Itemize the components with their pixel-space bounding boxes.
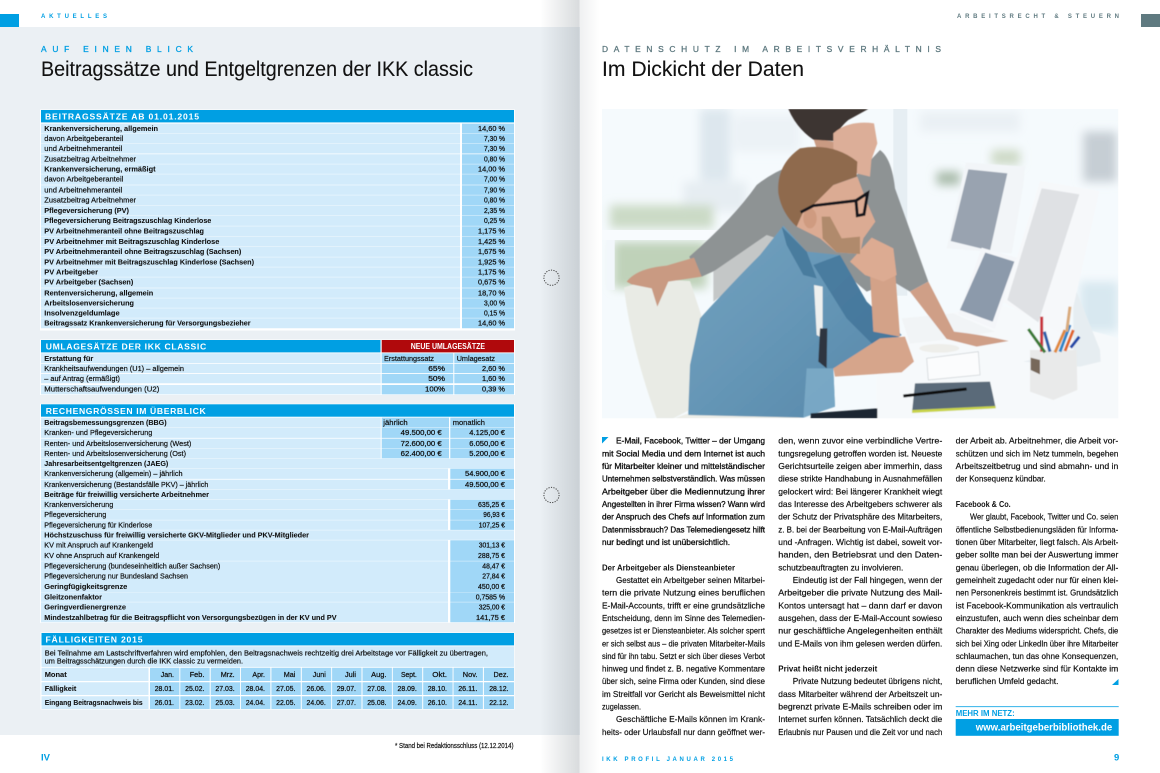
column 3: schützen und sich im Netz tummeln, begehen <box>956 448 1119 458</box>
panel: Rechengrößen table: Krankenversicherung (Bestandsfälle PKV) – jährlich <box>44 480 208 489</box>
panel: Fälligkeiten table: Aug. <box>371 670 386 679</box>
panel: Beitragssätze table: PV Arbeitnehmeranteil ohne Beitragszuschlag <box>44 227 204 236</box>
panel: Fälligkeiten table: Mai <box>284 670 296 679</box>
panel: Fälligkeiten table: 29.07. <box>337 684 356 693</box>
heading: Umlagesätze: UMLAGESÄTZE DER IKK CLASSIC <box>46 342 206 352</box>
right page number: 9 <box>1114 752 1119 764</box>
column 3: Charakter des Mediums widerspricht. Chefs, die <box>956 626 1119 636</box>
panel: Rechengrößen table: 54.900,00 € <box>465 469 506 478</box>
panel: Rechengrößen table <box>40 404 515 623</box>
panel: Rechengrößen table: 49.500,00 € <box>401 428 442 437</box>
panel: Rechengrößen table: 62.400,00 € <box>401 449 442 458</box>
badge: neue Umlagesätze <box>382 340 514 352</box>
panel: Beitragssätze table: 1,925 % <box>478 258 505 267</box>
man hair <box>778 147 857 227</box>
row labels <box>42 668 148 709</box>
panel: Umlagesätze table: 65% <box>428 364 445 373</box>
back monitor <box>947 162 1025 253</box>
column 2: und -Anfragen. Wichtig ist dabei, soweit vor- <box>778 537 943 547</box>
body text <box>602 575 766 737</box>
panel: Fälligkeiten table: Dez. <box>494 670 508 679</box>
panel: Beitragssätze table <box>40 110 515 330</box>
note text: Bei Teilnahme am Lastschriftverfahren wird empfohlen, den Beitragsnachweis rechtzeitig drei Arbeitstage vor Fälligkeit zu übertragen, <box>45 648 488 657</box>
spine shadow <box>540 0 600 773</box>
column 2: und E-Mails von ihm gelesen werden dürfen. <box>778 638 942 648</box>
panel: Beitragssätze table: 14,60 % <box>478 319 505 328</box>
panel: Rechengrößen table: 107,25 € <box>479 521 506 530</box>
man face <box>797 177 875 254</box>
column 3: gemeinheit zugedacht oder nur für einen klei- <box>956 575 1118 585</box>
body text: heits- oder Urlaubsfall nur dann geöffnet wer- <box>602 727 765 737</box>
panel: Beitragssätze table: 14,00 % <box>478 165 505 174</box>
panel: Rechengrößen table: Renten- und Arbeitslosenversicherung (Ost) <box>44 449 186 458</box>
panel: Beitragssätze table: Pflegeversicherung Beitragszuschlag Kinderlose <box>44 216 211 225</box>
left page header tab <box>0 14 19 27</box>
article intro: mit Social Media und dem Internet ist auch <box>602 448 765 458</box>
panel: Beitragssätze table: 0,80 % <box>484 196 505 205</box>
panel: Rechengrößen table: 48,47 € <box>482 562 506 571</box>
column 3: der Arbeit ab. Arbeitnehmer, die Arbeit vor- <box>956 436 1119 446</box>
panel: Rechengrößen table: 27,84 € <box>482 572 506 581</box>
body text: Entscheidung, denn im Sinne des Telemedien- <box>602 613 765 623</box>
column 3: ist Facebook-Kommunikation als vertraulich <box>956 600 1119 610</box>
left section label: AKTUELLES <box>41 14 107 20</box>
man pants <box>811 408 877 418</box>
panel: Fälligkeiten table: Mrz. <box>221 670 235 679</box>
panel: Rechengrößen table: Pflegeversicherung für Kinderlose <box>44 521 152 530</box>
body text: im Streitfall vor Gericht als Beweismittel nicht <box>602 689 766 699</box>
article intro: für Mitarbeiter kleiner und mittelständischer <box>602 461 765 471</box>
panel: Fälligkeiten table: 28.09. <box>398 684 417 693</box>
laptop base <box>902 313 995 344</box>
footnote: * Stand bei Redaktionsschluss (12.12.2014) <box>395 741 514 750</box>
body text: gesetzes ist er Diensteanbieter. Als solcher sperrt <box>602 626 766 636</box>
panel: Beitragssätze table: 7,30 % <box>484 144 505 153</box>
panel: Beitragssätze table: Zusatzbeitrag Arbeitnehmer <box>44 155 136 164</box>
left page number: IV <box>41 752 51 764</box>
pencils <box>1028 307 1079 352</box>
panel: Rechengrößen table: 6.050,00 € <box>469 439 506 448</box>
panel: Rechengrößen table: Krankenversicherung (allgemein) – jährlich <box>44 469 183 478</box>
main monitor stand <box>1026 295 1100 366</box>
article intro: Angestellten in ihrer Firma wissen? Wann wird <box>602 499 765 509</box>
panel: Beitragssätze table: 14,60 % <box>478 124 505 133</box>
panel: Rechengrößen table: Geringfügigkeitsgrenze <box>44 582 127 591</box>
panel: Beitragssätze table: Arbeitslosenversicherung <box>44 299 134 308</box>
panel: Rechengrößen table: Krankenversicherung <box>44 500 113 509</box>
column 2 <box>778 436 943 737</box>
panel: Beitragssätze table: Rentenversicherung, allgemein <box>44 289 154 298</box>
panel: Rechengrößen table: 4.125,00 € <box>469 428 506 437</box>
callout: mehr im Netz: MEHR IM NETZ: <box>956 708 1015 718</box>
table rows: label column <box>41 124 460 328</box>
woman body <box>689 150 928 292</box>
panel: Beitragssätze table: PV Arbeitgeber (Sachsen) <box>44 278 134 287</box>
man beard <box>822 217 860 254</box>
panel: Fälligkeiten table: 25.03. <box>215 698 235 707</box>
panel: Fälligkeiten table: 24.04. <box>246 698 265 707</box>
column 3: beruflichen Umfeld gedacht. <box>956 676 1058 686</box>
panel: Rechengrößen table: 49.500,00 € <box>465 480 506 489</box>
column 2: diese strikte Handhabung in Ausnahmefällen <box>778 474 943 484</box>
man denim shirt <box>688 226 902 418</box>
man arm <box>870 268 900 337</box>
panel: Beitragssätze table: Pflegeversicherung (PV) <box>44 206 129 215</box>
column 2: der Schutz der Privatsphäre des Mitarbeiters, <box>778 512 942 522</box>
keyboard <box>927 352 980 380</box>
column 2: den, wenn zuvor eine verbindliche Vertre- <box>778 436 943 446</box>
woman forearm <box>910 282 1009 347</box>
column 2: handen, den Betriebsrat und den Daten- <box>778 550 943 560</box>
panel: Rechengrößen table: Höchstzuschuss für freiwillig versicherte GKV-Mitglieder und PKV-Mitglieder <box>44 531 309 540</box>
panel: Umlagesätze table: 1,60 % <box>482 374 505 383</box>
column 2: Internet surfen können. Tatsächlich deckt die <box>778 714 943 724</box>
panel: Rechengrößen table: jährlich <box>382 418 408 427</box>
panel: Fälligkeiten table: 27.03. <box>215 684 235 693</box>
panel: Fälligkeiten table: 28.01. <box>155 684 174 693</box>
column 3: schlaumachen, tun das ohne Konsequenzen, <box>956 651 1118 661</box>
column 3: Arbeitszeitbetrug und sind abmahn- und in <box>956 461 1119 471</box>
month cells <box>150 668 514 709</box>
panel: Fälligkeiten table: 22.05. <box>276 698 295 707</box>
column 2: nur geschäftliche Angelegenheiten enthält <box>778 626 943 636</box>
photo: two colleagues at a computer <box>602 109 1118 418</box>
column 3: tionen über Mitarbeiter, liegt falsch. Als Arbeit- <box>956 537 1118 547</box>
panel: Umlagesätze table: Erstattungssatz <box>384 354 434 363</box>
desk <box>876 322 1100 418</box>
panel: Beitragssätze table: 0,25 % <box>484 216 505 225</box>
left kicker: AUF EINEN BLICK <box>41 44 193 54</box>
panel: Umlagesätze table: Krankheitsaufwendungen (U1) – allgemein <box>44 364 184 373</box>
panel: Fälligkeiten table: Juli <box>345 670 356 679</box>
column 2: Erlaubnis nur Pausen und die Zeit vor und nach <box>778 727 943 737</box>
man lower arm <box>833 337 914 377</box>
panel: Rechengrößen table: Renten- und Arbeitslosenversicherung (West) <box>44 439 192 448</box>
panel: Rechengrößen table: KV ohne Anspruch auf Krankengeld <box>44 551 159 560</box>
right kicker: DATENSCHUTZ IM ARBEITSVERHÄLTNIS <box>602 44 941 54</box>
callout: mehr im Netz: www.arbeitgeberbibliothek.de <box>975 723 1113 734</box>
pen holder <box>1030 350 1077 400</box>
panel: Fälligkeiten table: 28.04. <box>246 684 265 693</box>
body text: er sich selbst aus – die privaten Mitarbeiter-Mails <box>602 638 765 648</box>
body text: tern die private Nutzung eines beruflichen <box>602 588 765 598</box>
panel: Fälligkeiten table: 26.10. <box>428 698 447 707</box>
panel: Umlagesätze table <box>40 340 515 395</box>
panel: Fälligkeiten table: Monat <box>45 670 67 679</box>
article intro: der Anspruch des Chefs auf Information zum <box>602 512 765 522</box>
panel: Beitragssätze table: PV Arbeitgeber <box>44 268 98 277</box>
panel: Rechengrößen table: Geringverdienergrenze <box>44 603 126 612</box>
panel: Rechengrößen table: KV mit Anspruch auf Krankengeld <box>44 541 153 550</box>
body text: sind für ihn tabu. Setzt er sich über dieses Verbot <box>602 651 766 661</box>
panel: Rechengrößen table: 288,75 € <box>478 551 506 560</box>
woman neck <box>813 138 840 155</box>
panel: Beitragssätze table: 1,675 % <box>478 247 505 256</box>
column 2: tungsregelung getroffen worden ist. Neueste <box>778 448 943 458</box>
note text: um Beitragsschätzungen durch die IKK classic zu vermeiden. <box>45 656 243 665</box>
panel: Beitragssätze table: 7,90 % <box>484 186 505 195</box>
article intro: Arbeitgeber über die Mediennutzung ihrer <box>602 486 765 496</box>
panel: Rechengrößen table: Jahresarbeitsentgeltgrenzen (JAEG) <box>44 459 169 468</box>
panel: Fälligkeiten table: Juni <box>313 670 326 679</box>
body text: zugelassen. <box>602 702 641 712</box>
article intro: nur bedingt und ist unübersichtlich. <box>602 537 730 547</box>
article end marker <box>1112 679 1118 685</box>
woman arm on chair <box>627 258 702 307</box>
panel: Rechengrößen table: Kranken- und Pflegeversicherung <box>44 428 152 437</box>
column 2: Eindeutig ist der Fall hingegen, wenn der <box>793 575 943 585</box>
subheading: Facebook & Co. <box>956 499 1011 509</box>
left title: Beitragssätze und Entgeltgrenzen der IKK classic <box>41 58 473 81</box>
main monitor <box>1041 285 1076 322</box>
woman face <box>833 123 877 177</box>
panel: Beitragssätze table: 7,00 % <box>484 175 505 184</box>
column 2: Gerichtsurteile zeigen aber immerhin, dass <box>778 461 942 471</box>
panel: Fälligkeiten table: 26.06. <box>306 684 326 693</box>
man glasses <box>801 193 868 216</box>
panel: Rechengrößen table: 450,00 € <box>478 582 506 591</box>
panel: Rechengrößen table: Beiträge für freiwillig versicherte Arbeitnehmer <box>44 490 209 499</box>
note text <box>42 646 514 667</box>
panel: Beitragssätze table: PV Arbeitnehmeranteil ohne Beitragszuschlag (Sachsen) <box>44 247 242 256</box>
panel: Fälligkeiten table: 24.11. <box>458 698 478 707</box>
badge: neue Umlagesätze: NEUE UMLAGESÄTZE <box>411 342 486 351</box>
panel: Beitragssätze table: Krankenversicherung, ermäßigt <box>44 165 156 174</box>
panel: Beitragssätze table: Beitragssatz Krankenversicherung für Versorgungsbezieher <box>44 319 251 328</box>
hole punch marks <box>544 270 559 503</box>
right page header tab <box>1141 14 1160 27</box>
mouse <box>919 344 959 353</box>
panel: Umlagesätze table: Erstattung für <box>44 354 93 363</box>
panel: Fälligkeiten table: 27.07. <box>337 698 356 707</box>
subheading: Privat heißt nicht jederzeit <box>778 664 877 674</box>
panel: Fälligkeiten table: Fälligkeit <box>45 684 77 693</box>
heading: Fälligkeiten: FÄLLIGKEITEN 2015 <box>46 635 143 645</box>
panel: Beitragssätze table: 1,425 % <box>478 237 505 246</box>
column 2: ausgehen, dass der E-Mail-Account sowieso <box>778 613 943 623</box>
column 3 <box>956 436 1119 686</box>
panel: Rechengrößen table: Gleitzonenfaktor <box>44 593 102 602</box>
body text: über sich, seine Firma oder Kunden, sind diese <box>602 676 765 686</box>
left page background <box>0 27 580 735</box>
panel: Rechengrößen table: Beitragsbemessungsgrenzen (BBG) <box>44 418 167 427</box>
column 1 <box>602 436 766 737</box>
panel: Fälligkeiten table: 28.10. <box>428 684 447 693</box>
column 2: begrenzt private E-Mails schreiben oder im <box>778 702 942 712</box>
panel: Umlagesätze table: 100% <box>425 385 445 394</box>
woman hair <box>788 109 868 141</box>
panel: Rechengrößen table: 301,13 € <box>479 541 506 550</box>
right section label: ARBEITSRECHT & STEUERN <box>957 14 1119 20</box>
panel: Beitragssätze table: Zusatzbeitrag Arbeitnehmer <box>44 196 136 205</box>
column 2: Kontos untersagt hat – dann darf er davon <box>778 600 943 610</box>
panel: Beitragssätze table: 0,80 % <box>484 155 505 164</box>
panel: Beitragssätze table: davon Arbeitgeberanteil <box>44 175 124 184</box>
small monitor <box>981 247 990 251</box>
stylus <box>903 389 967 396</box>
panel: Beitragssätze table: Insolvenzgeldumlage <box>44 309 120 318</box>
column 3: öffentliche Selbstbedienungsläden für Informa- <box>956 524 1118 534</box>
panel: Beitragssätze table: 7,30 % <box>484 134 505 143</box>
body text: E-Mail-Accounts, trifft er eine grundsätzliche <box>602 600 765 610</box>
callout: mehr im Netz <box>956 706 1119 736</box>
column 3: der Konsequenz kündbar. <box>956 474 1046 484</box>
column 3: denn diese Netzwerke sind für Kontakte im <box>956 664 1118 674</box>
table rows: value column <box>462 124 514 328</box>
tablet <box>912 382 996 412</box>
column 2: Private Nutzung bedeutet übrigens nicht, <box>793 676 942 686</box>
panel: Fälligkeiten table: 22.12. <box>489 698 508 707</box>
panel: Beitragssätze table: 0,675 % <box>478 278 505 287</box>
heading: Rechengrößen: RECHENGRÖSSEN IM ÜBERBLICK <box>46 406 206 416</box>
panel: Fälligkeiten table: Sept. <box>401 670 417 679</box>
panel: Fälligkeiten table <box>40 632 514 710</box>
article intro: Datenmissbrauch? Das Telemediengesetz hilft <box>602 524 766 534</box>
rows: label column <box>41 418 514 622</box>
right footer label: IKK PROFIL JANUAR 2015 <box>602 757 734 763</box>
panel: Fälligkeiten table: Eingang Beitragsnachweis bis <box>45 698 143 707</box>
panel: Fälligkeiten table: 23.02. <box>185 698 204 707</box>
panel: Rechengrößen table: 96,93 € <box>483 510 506 519</box>
panel: Rechengrößen table: Pflegeversicherung nur Bundesland Sachsen <box>44 572 188 581</box>
column 3: Wer glaubt, Facebook, Twitter und Co. seien <box>970 512 1119 522</box>
body text: hinweg und findet z. B. negative Kommentare <box>602 664 765 674</box>
panel: Fälligkeiten table: Feb. <box>190 670 204 679</box>
column 2: schutzbeauftragten zu involvieren. <box>778 562 903 572</box>
column 3: einzustufen, auch wenn dies scheinbar dem <box>956 613 1118 623</box>
column 2: Arbeitgeber die private Nutzung des Mail- <box>778 588 943 598</box>
column 2: das Interesse des Arbeitgebers schwerer als <box>778 499 942 509</box>
panel: Beitragssätze table: 1,175 % <box>478 268 505 277</box>
panel: Fälligkeiten table: 27.05. <box>276 684 295 693</box>
column 3: sich bei Xing oder LinkedIn über ihre Mitarbeiter <box>956 638 1118 648</box>
panel: Fälligkeiten table: 26.11. <box>458 684 478 693</box>
column 2: dass Mitarbeiter während der Arbeitszeit un- <box>778 689 943 699</box>
panel: Rechengrößen table: 0,7585 % <box>476 593 505 602</box>
column 2: gelockert wird: Bei längerer Krankheit wiegt <box>778 486 943 496</box>
man fist and chin hand <box>850 238 897 282</box>
panel: Fälligkeiten table: 25.02. <box>185 684 204 693</box>
right title: Im Dickicht der Daten <box>602 58 804 81</box>
panel: Beitragssätze table: PV Arbeitnehmer mit Beitragszuschlag Kinderlose (Sachsen) <box>44 258 254 267</box>
panel: Beitragssätze table: 18,70 % <box>478 289 505 298</box>
panel: Umlagesätze table: – auf Antrag (ermäßigt) <box>44 374 120 383</box>
panel: Beitragssätze table: und Arbeitnehmeranteil <box>44 144 123 153</box>
article intro <box>602 436 766 547</box>
panel: Rechengrößen table: Mindestzahlbetrag für die Beitragspflicht von Versorgungsbezügen in der KV und PV <box>44 613 337 622</box>
column 3: genau überlegen, ob die Information der All- <box>956 562 1118 572</box>
panel: Fälligkeiten table: 28.12. <box>489 684 508 693</box>
shirt shading <box>813 255 900 348</box>
body text: Gestattet ein Arbeitgeber seinen Mitarbei- <box>616 575 765 585</box>
panel: Fälligkeiten table: Jan. <box>161 670 174 679</box>
panel: Fälligkeiten table: 27.08. <box>367 684 386 693</box>
panel: Fälligkeiten table: 26.01. <box>155 698 174 707</box>
panel: Beitragssätze table: Krankenversicherung, allgemein <box>44 124 158 133</box>
panel: Beitragssätze table: 0,15 % <box>484 309 505 318</box>
panel: Rechengrößen table: 635,25 € <box>478 500 506 509</box>
panel: Beitragssätze table: PV Arbeitnehmer mit Beitragszuschlag Kinderlose <box>44 237 219 246</box>
panel: Umlagesätze table: Umlagesatz <box>457 354 495 363</box>
panel: Beitragssätze table: 3,00 % <box>484 299 505 308</box>
panel: Umlagesätze table: Mutterschaftsaufwendungen (U2) <box>44 385 160 394</box>
panel: Umlagesätze table: 0,39 % <box>482 385 505 394</box>
panel: Rechengrößen table: 325,00 € <box>479 603 506 612</box>
panel: Beitragssätze table: 2,35 % <box>484 206 505 215</box>
article intro marker <box>602 437 608 444</box>
panel: Rechengrößen table: monatlich <box>453 418 485 427</box>
column 3: geber sollte man bei der Auswertung immer <box>956 550 1119 560</box>
panel: Rechengrößen table: Pflegeversicherung <box>44 510 106 519</box>
subheading: Der Arbeitgeber als Diensteanbieter <box>602 562 736 572</box>
panel: Rechengrößen table: Pflegeversicherung (bundeseinheitlich außer Sachsen) <box>44 562 221 571</box>
panel: Fälligkeiten table: Okt. <box>432 670 447 679</box>
rows: value columns <box>382 418 514 622</box>
panel: Fälligkeiten table: 24.06. <box>306 698 326 707</box>
panel: Beitragssätze table: davon Arbeitgeberanteil <box>44 134 124 143</box>
panel: Umlagesätze table: 2,60 % <box>482 364 505 373</box>
panel: Fälligkeiten table: Nov. <box>463 670 478 679</box>
panel: Rechengrößen table: 72.600,00 € <box>401 439 442 448</box>
article intro: E-Mail, Facebook, Twitter – der Umgang <box>616 436 765 446</box>
panel: Fälligkeiten table: 24.09. <box>398 698 417 707</box>
column 3: nen Personenkreis bestimmt ist. Grundsätzlich <box>956 588 1119 598</box>
panel: Fälligkeiten table: 25.08. <box>367 698 386 707</box>
panel: Fälligkeiten table: Apr. <box>252 670 265 679</box>
man shirt opening <box>814 285 823 338</box>
panel: Rechengrößen table: 5.200,00 € <box>469 449 506 458</box>
panel: Beitragssätze table: 1,175 % <box>478 227 505 236</box>
chair <box>624 280 703 418</box>
panel: Beitragssätze table: und Arbeitnehmeranteil <box>44 186 123 195</box>
heading: Beitragssätze: BEITRAGSSÄTZE AB 01.01.2015 <box>45 112 199 122</box>
panel: Umlagesätze table: 50% <box>428 374 445 383</box>
man ear <box>803 208 817 228</box>
body text: Geschäftliche E-Mails können im Krank- <box>616 714 765 724</box>
article intro: Unternehmen selbstverständlich. Was müssen <box>602 474 765 484</box>
panel: Rechengrößen table: 141,75 € <box>476 613 506 622</box>
column 2: z. B. bei der Bearbeitung von E-Mail-Aufträgen <box>778 524 943 534</box>
